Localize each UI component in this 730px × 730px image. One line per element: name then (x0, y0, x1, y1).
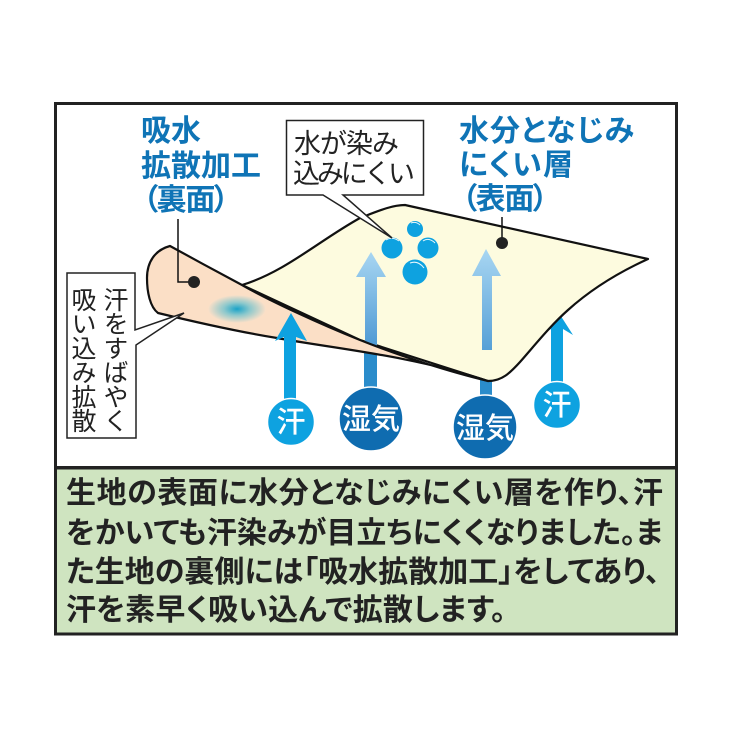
heading: 水分となじみにくい層: にくい層 (459, 149, 573, 182)
arrow: humidity right base (453, 375, 517, 459)
heading: 水分となじみにくい層: （表面） (462, 183, 548, 216)
arrow: sweat left: 汗 (276, 406, 306, 439)
callout: 水が染み込みにくい: 水が染み (294, 129, 399, 159)
explanation panel: た生地の裏側には「吸水拡散加工」をしてあり、 (66, 556, 660, 589)
arrow: sweat left (268, 313, 314, 446)
callout: 水が染み込みにくい (286, 120, 424, 238)
heading: 吸水拡散加工: 吸水 (141, 115, 201, 148)
callout: 汗をすばやく吸い込み拡散: 吸い込み拡散 (68, 287, 96, 433)
water droplets (382, 221, 438, 284)
explanation panel: をかいても汗染みが目立ちにくくなりました。ま (66, 516, 663, 550)
callout: 水が染み込みにくい: 込みにくい (293, 159, 415, 189)
callout: 汗をすばやく吸い込み拡散 (67, 273, 184, 438)
explanation panel: 汗を素早く吸い込んで拡散します。 (66, 594, 506, 627)
heading: 吸水拡散加工 (141, 115, 261, 217)
absorption spot (208, 295, 266, 323)
leader: back side (178, 219, 200, 288)
arrow: humidity right base: 湿気 (456, 412, 514, 445)
arrow: humidity left base: 湿気 (342, 403, 400, 436)
heading: 水分となじみにくい層: 水分となじみ (459, 115, 634, 148)
fabric: cream surface (242, 205, 648, 381)
leader: surface (496, 217, 508, 249)
arrow: humidity left base (339, 345, 403, 451)
fabric: peach underside (147, 246, 488, 381)
heading: 吸水拡散加工: 拡散加工 (141, 150, 261, 183)
arrow: humidity left upper (356, 252, 386, 350)
explanation panel: 生地の表面に水分となじみにくい層を作り、汗 (66, 477, 663, 510)
arrow: humidity right upper (472, 249, 501, 350)
explanation panel (56, 468, 676, 634)
diagram panel (56, 104, 676, 468)
callout: 汗をすばやく吸い込み拡散: 汗をすばやく (100, 287, 128, 433)
heading: 水分となじみにくい層 (459, 115, 634, 216)
heading: 吸水拡散加工: （裏面） (143, 184, 229, 217)
arrow: sweat right (534, 310, 580, 428)
arrow: sweat right: 汗 (542, 389, 572, 422)
